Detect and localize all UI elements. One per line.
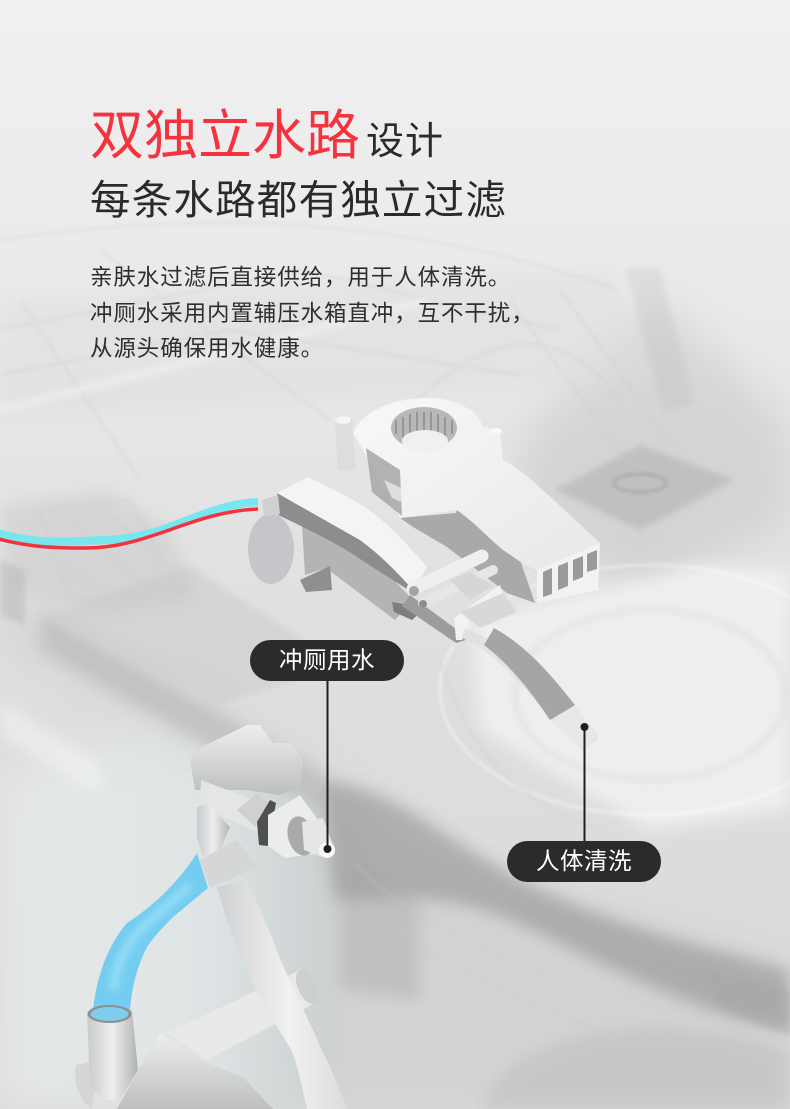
- bottom metal fitting: [75, 1005, 273, 1109]
- description text: [90, 265, 535, 361]
- description text: 亲肤水过滤后直接供给，用于人体清洗。: [90, 265, 511, 290]
- plumbing: crossbar: [167, 967, 323, 1060]
- plumbing: grey hose: [217, 880, 347, 1109]
- label: flush water: [250, 640, 404, 681]
- label: body wash: 人体清洗: [536, 848, 632, 874]
- water line: flush water (cyan): [0, 502, 258, 542]
- description text: 冲厕水采用内置辅压水箱直冲，互不干扰，: [90, 300, 535, 326]
- blue water hose: [93, 853, 208, 1010]
- label: flush water: 冲厕用水: [279, 647, 375, 673]
- callout leader: body wash: [580, 723, 588, 842]
- water line: body wash (red): [0, 509, 258, 548]
- description text: 从源头确保用水健康。: [90, 336, 324, 361]
- title line 1: 双独立水路设计: [90, 106, 444, 166]
- valve assembly: [248, 477, 517, 643]
- title line 2: 每条水路都有独立过滤: [90, 177, 507, 223]
- callout leader: flush water: [324, 680, 332, 853]
- top metal valve with nozzle: [190, 725, 335, 888]
- wash outlet flat tube: [462, 628, 598, 751]
- fan and air duct part: [335, 398, 600, 603]
- label: body wash: [507, 841, 661, 882]
